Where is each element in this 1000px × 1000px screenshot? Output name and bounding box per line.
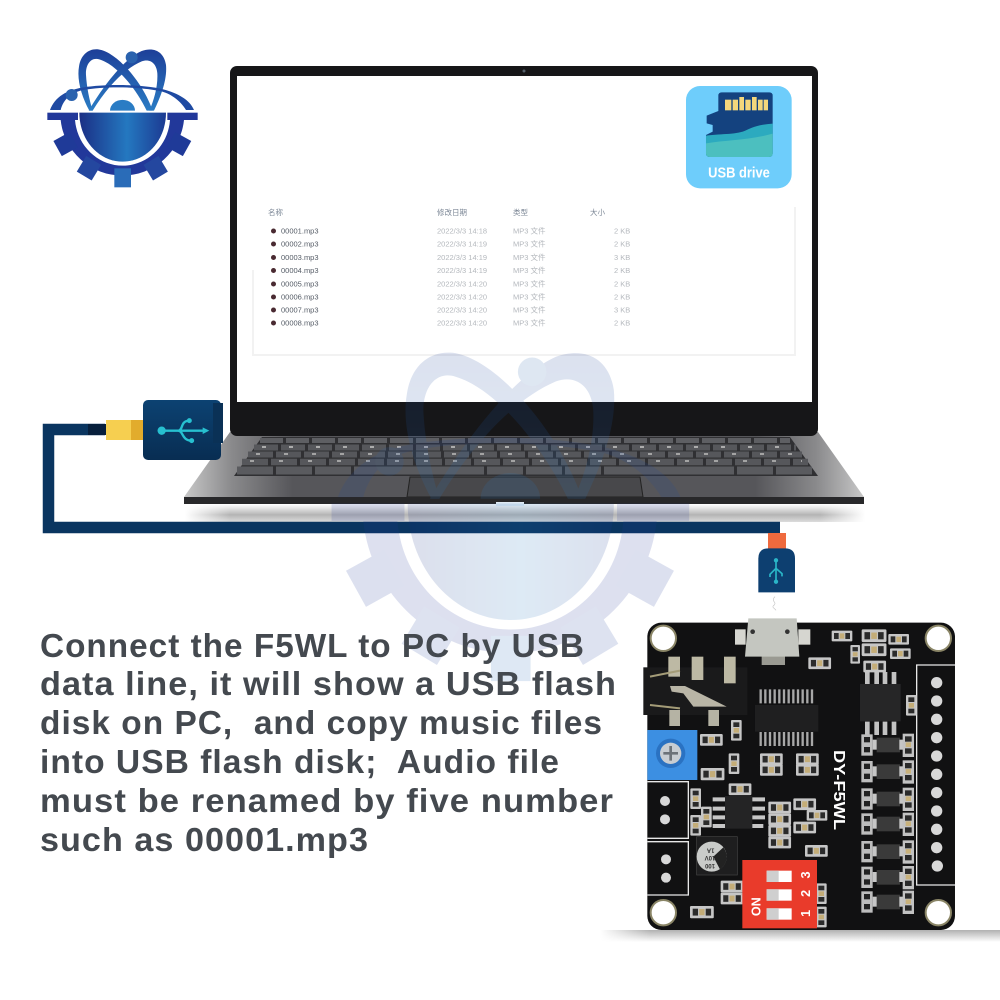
file details: MP3 文件 bbox=[513, 318, 546, 328]
amplifier chip bbox=[860, 672, 901, 735]
red DIP switch: 3 bbox=[799, 871, 813, 879]
icon: USB drive: USB drive bbox=[708, 165, 770, 181]
USB plug: yellow metal tip bbox=[106, 420, 143, 440]
audio jack bbox=[643, 657, 747, 726]
plug wire bbox=[773, 597, 776, 610]
instruction text: must be renamed by five number bbox=[40, 782, 614, 819]
small SMD components bbox=[690, 629, 917, 927]
icon: USB trident vertical bbox=[770, 559, 782, 583]
file list column headings: 修改日期 bbox=[437, 207, 467, 217]
trackpad bbox=[407, 477, 643, 497]
red DIP switch: 1 bbox=[799, 910, 813, 917]
file names: 00003.mp3 bbox=[281, 253, 319, 262]
file details: 2 KB bbox=[614, 226, 630, 236]
file details: 2 KB bbox=[614, 318, 630, 328]
file details: 3 KB bbox=[614, 253, 630, 262]
file details: MP3 文件 bbox=[513, 304, 546, 314]
electrolytic capacitor: 10V bbox=[705, 854, 715, 860]
file details: 2 KB bbox=[614, 266, 630, 275]
PCB bbox=[647, 623, 955, 930]
file details bbox=[437, 226, 630, 328]
file details: MP3 文件 bbox=[513, 265, 546, 275]
file list column headings: 类型 bbox=[513, 207, 528, 217]
micro USB plug bbox=[758, 533, 795, 610]
electrolytic capacitor bbox=[697, 837, 737, 875]
main chip bbox=[755, 689, 818, 746]
instruction text: into USB flash disk; Audio file bbox=[40, 743, 560, 780]
file names: 00007.mp3 bbox=[281, 306, 319, 314]
file details: 2022/3/3 14:19 bbox=[437, 240, 487, 248]
file list column headings: 大小 bbox=[590, 207, 605, 217]
red DIP switch bbox=[742, 860, 817, 928]
panel outline bbox=[253, 207, 795, 355]
file list column headings: 名称 bbox=[268, 207, 283, 217]
instruction text bbox=[40, 627, 617, 858]
plug red tip bbox=[768, 533, 786, 550]
output diodes column bbox=[861, 734, 914, 914]
file details: 2022/3/3 14:18 bbox=[437, 226, 487, 236]
file details: 2022/3/3 14:20 bbox=[437, 318, 487, 328]
file details: MP3 文件 bbox=[513, 292, 546, 302]
board model label: DY-F5WL bbox=[830, 750, 847, 830]
logo bbox=[47, 49, 198, 187]
plug body bbox=[758, 548, 795, 592]
laptop deck bbox=[184, 432, 864, 497]
laptop bbox=[184, 66, 865, 522]
file details: MP3 文件 bbox=[513, 252, 546, 262]
file details: 2022/3/3 14:19 bbox=[437, 266, 487, 275]
file details: MP3 文件 bbox=[513, 238, 546, 248]
file names: 00005.mp3 bbox=[281, 280, 319, 288]
file names: 00002.mp3 bbox=[281, 240, 319, 248]
instruction text: disk on PC, and copy music files bbox=[40, 704, 603, 741]
right terminal header bbox=[917, 665, 955, 885]
file details: MP3 文件 bbox=[513, 226, 546, 236]
instruction text: such as 00001.mp3 bbox=[40, 821, 369, 858]
camera bbox=[522, 70, 526, 72]
laptop lid bezel bbox=[230, 66, 818, 436]
USB plug body bbox=[143, 400, 223, 460]
file details: 2022/3/3 14:20 bbox=[437, 280, 487, 288]
file details: 2 KB bbox=[614, 280, 630, 288]
file details: 2022/3/3 14:20 bbox=[437, 292, 487, 302]
file details: MP3 文件 bbox=[513, 278, 546, 288]
file icons bbox=[271, 228, 276, 326]
potentiometer bbox=[647, 730, 697, 780]
electrolytic capacitor: 100 bbox=[704, 862, 715, 868]
instruction text: Connect the F5WL to PC by USB bbox=[40, 627, 585, 664]
file names: 00001.mp3 bbox=[281, 226, 319, 236]
USB data cable bbox=[48, 424, 780, 528]
file names: 00004.mp3 bbox=[281, 266, 319, 275]
red DIP switch: 2 bbox=[799, 890, 813, 897]
watermark logo bbox=[332, 353, 689, 681]
file details: 2022/3/3 14:20 bbox=[437, 306, 487, 314]
file names: 00008.mp3 bbox=[281, 318, 319, 328]
file names bbox=[281, 226, 319, 328]
file list panel bbox=[253, 207, 795, 355]
red DIP switch: ON bbox=[749, 897, 763, 916]
file details: 3 KB bbox=[614, 306, 630, 314]
circuit board DY-F5WL bbox=[643, 618, 955, 930]
icon: USB trident bbox=[159, 419, 209, 442]
file details: 2022/3/3 14:19 bbox=[437, 253, 487, 262]
micro USB socket bbox=[735, 618, 810, 665]
board shadow bbox=[600, 928, 1000, 944]
instruction text: data line, it will show a USB flash bbox=[40, 665, 617, 702]
laptop screen bbox=[237, 76, 812, 402]
file details: 2 KB bbox=[614, 240, 630, 248]
keyboard bbox=[234, 437, 818, 476]
regulator chip bbox=[713, 796, 765, 829]
front notch bbox=[496, 502, 524, 506]
file list column headings bbox=[268, 207, 605, 217]
left terminal headers bbox=[647, 782, 688, 895]
electrolytic capacitor: 1A bbox=[706, 846, 714, 852]
file names: 00006.mp3 bbox=[281, 292, 319, 302]
file details: 2 KB bbox=[614, 292, 630, 302]
deck front edge bbox=[184, 497, 864, 504]
icon: USB drive bbox=[686, 86, 792, 188]
laptop under-edge shadow bbox=[185, 504, 865, 522]
mounting holes bbox=[651, 626, 951, 925]
